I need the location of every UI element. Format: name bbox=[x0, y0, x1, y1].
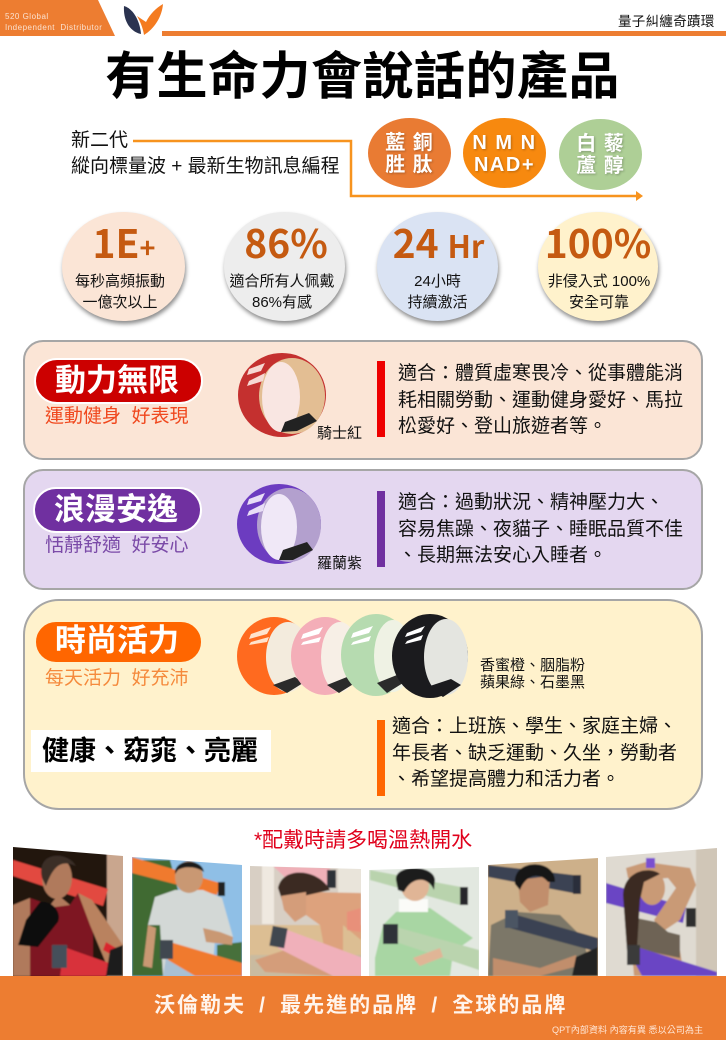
pill heading bbox=[33, 487, 202, 533]
stat caption: 每秒高頻振動 bbox=[75, 273, 165, 290]
color label: 羅蘭紫 bbox=[317, 555, 362, 572]
bands: four colors bbox=[237, 614, 468, 698]
pill heading: 浪漫安逸 bbox=[54, 492, 178, 527]
ingredient: copper peptide bbox=[368, 118, 451, 188]
slogan bbox=[31, 730, 271, 772]
stat caption bbox=[229, 273, 334, 310]
suitability text bbox=[392, 716, 677, 790]
distributor text bbox=[5, 13, 102, 32]
suitability text: 松愛好、登山旅遊者等。 bbox=[398, 416, 607, 437]
suitability text: 、希望提高體力和活力者。 bbox=[392, 769, 620, 790]
photo: stretching woman bbox=[604, 846, 719, 978]
green band bbox=[341, 614, 412, 696]
header rule bbox=[162, 31, 726, 36]
panel: purple romance bbox=[23, 469, 703, 590]
suitability text bbox=[398, 492, 683, 566]
photo: boxer bbox=[10, 845, 125, 980]
stat caption bbox=[75, 273, 165, 310]
stat caption: 持續激活 bbox=[407, 294, 468, 310]
band: knight red bbox=[238, 353, 326, 437]
header: distributor tab bbox=[0, 0, 116, 36]
stat caption: 適合所有人佩戴 bbox=[229, 273, 334, 290]
photo: reclining man bbox=[486, 856, 600, 978]
stat: 100% bbox=[538, 212, 658, 321]
tagline: 恬靜舒適 好安心 bbox=[45, 535, 189, 556]
photo: green sweater bbox=[367, 865, 481, 979]
intro text: 縱向標量波 + 最新生物訊息編程 bbox=[71, 156, 340, 177]
intro text: 新二代 bbox=[71, 130, 128, 151]
ingredient name bbox=[385, 132, 434, 176]
stat caption: 安全可靠 bbox=[569, 294, 629, 310]
stat caption bbox=[548, 273, 650, 310]
distributor text: 520 Global bbox=[5, 12, 49, 21]
ingredient name: 胜 肽 bbox=[385, 154, 434, 176]
photo: plank bbox=[248, 864, 363, 980]
suitability text: 耗相關勞動、運動健身愛好、馬拉 bbox=[398, 390, 683, 410]
stat caption: 86%有感 bbox=[252, 294, 312, 310]
color labels: 香蜜橙、胭脂粉 bbox=[480, 657, 585, 674]
orange band bbox=[237, 617, 311, 695]
note: *配戴時請多喝溫熱開水 bbox=[254, 829, 472, 852]
stat caption: 一億次以上 bbox=[82, 294, 158, 310]
distributor text: Independent Distributor bbox=[5, 23, 102, 32]
stat number: 86% bbox=[244, 214, 328, 270]
icon: brand logo bbox=[124, 4, 163, 35]
ingredient name: 蘆 醇 bbox=[576, 155, 625, 177]
stat caption bbox=[407, 273, 468, 310]
photo strip bbox=[13, 847, 717, 976]
arrow: connector line bbox=[133, 140, 643, 201]
panel: yellow vitality bbox=[23, 599, 703, 810]
black band bbox=[392, 614, 468, 698]
ingredient name: 藍 銅 bbox=[385, 132, 434, 154]
color labels: 蘋果綠、石墨黑 bbox=[480, 674, 585, 691]
stat number: 1E+ bbox=[93, 214, 155, 270]
photo: runner bbox=[130, 855, 245, 980]
pill heading: 動力無限 bbox=[55, 363, 179, 398]
stat number: 24 Hr bbox=[393, 214, 484, 270]
pill heading bbox=[34, 358, 203, 404]
stat number: 100% bbox=[545, 214, 651, 270]
color labels bbox=[480, 657, 585, 691]
ingredient name: 白 藜 bbox=[576, 133, 625, 155]
stat: 24 Hr bbox=[377, 212, 498, 321]
ingredient name: N M N bbox=[472, 132, 537, 154]
slogan: 健康、窈窕、亮麗 bbox=[42, 736, 258, 766]
stat caption: 非侵入式 100% bbox=[548, 273, 650, 290]
tagline: 運動健身 好表現 bbox=[45, 406, 189, 427]
pill heading bbox=[34, 620, 203, 664]
suitability text: 、長期無法安心入睡者。 bbox=[398, 545, 607, 566]
panel: red power bbox=[23, 340, 703, 460]
header label: 量子糾纏奇蹟環 bbox=[618, 14, 715, 29]
ingredient name bbox=[576, 132, 625, 177]
suitability text: 適合：過動狀況、精神壓力大、 bbox=[398, 492, 664, 513]
footer slogan: 沃倫勒夫 / 最先進的品牌 / 全球的品牌 bbox=[154, 994, 567, 1017]
ingredient name: NAD+ bbox=[474, 154, 535, 176]
pill heading: 時尚活力 bbox=[55, 623, 179, 658]
suitability text: 容易焦躁、夜貓子、睡眠品質不佳 bbox=[398, 518, 683, 540]
suitability text: 適合：上班族、學生、家庭主婦、 bbox=[392, 716, 677, 737]
stat: 86% bbox=[224, 212, 345, 321]
suitability text: 適合：體質虛寒畏冷、從事體能消 bbox=[398, 363, 683, 384]
pink band bbox=[291, 617, 359, 695]
intro text bbox=[71, 130, 340, 177]
ingredient: resveratrol bbox=[559, 119, 642, 190]
disclaimer: QPT內部資料 內容有異 悉以公司為主 bbox=[552, 1025, 703, 1035]
footer band bbox=[0, 976, 726, 1040]
tagline: 每天活力 好充沛 bbox=[45, 668, 189, 689]
title: 有生命力會說話的產品 bbox=[105, 48, 620, 105]
stat: 1E+ bbox=[62, 212, 185, 321]
ingredient name bbox=[472, 132, 537, 176]
ingredient: NMN NAD+ bbox=[463, 118, 546, 188]
stat caption: 24小時 bbox=[414, 273, 461, 290]
accent bar bbox=[377, 491, 385, 567]
color label: 騎士紅 bbox=[317, 425, 362, 442]
suitability text: 年長者、缺乏運動、久坐，勞動者 bbox=[392, 742, 677, 764]
band: violet bbox=[237, 484, 321, 564]
accent bar bbox=[377, 720, 385, 796]
suitability text bbox=[398, 362, 683, 437]
accent bar bbox=[377, 361, 385, 437]
